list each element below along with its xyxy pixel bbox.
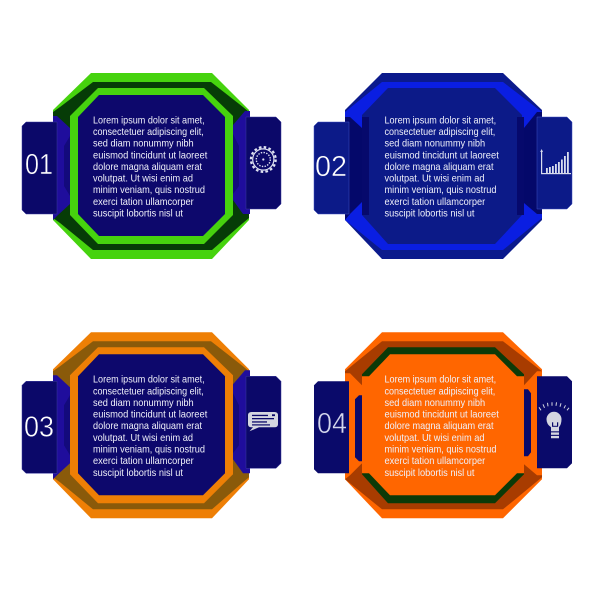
left number tab — [314, 122, 349, 214]
body text — [93, 115, 207, 220]
body text: sed diam nonummy nibh — [93, 139, 194, 150]
left connector — [53, 375, 70, 479]
left number tab — [314, 381, 349, 473]
body text: euismod tincidunt ut laoreet — [384, 410, 499, 421]
panel: step 04 bright orange — [314, 332, 572, 518]
right icon tab — [246, 117, 281, 209]
inner orange octagon — [70, 347, 233, 503]
left navy slot — [355, 395, 362, 461]
body text: volutpat. Ut wisi enim ad — [93, 174, 193, 185]
left number tab — [22, 381, 57, 473]
left connector shade — [64, 136, 70, 196]
body text: dolore magna aliquam erat — [93, 162, 202, 173]
right dark connector — [524, 112, 542, 214]
right orange connector — [524, 371, 542, 475]
body text: exerci tation ullamcorper — [384, 456, 486, 467]
left dark stripe — [362, 117, 369, 215]
right connector — [233, 370, 250, 473]
icon: speech bubble — [248, 412, 278, 431]
body text: consectetuer adipiscing elit, — [93, 127, 204, 138]
navy text panel — [78, 95, 225, 236]
body text: Lorem ipsum dolor sit amet, — [384, 375, 496, 386]
dark green ring — [53, 82, 249, 250]
body text: exerci tation ullamcorper — [384, 197, 486, 208]
outer dark blue octagon — [345, 73, 542, 259]
body text: minim veniam, quis nostrud — [93, 185, 205, 196]
body text: consectetuer adipiscing elit, — [93, 386, 204, 397]
outer green octagon — [53, 73, 249, 259]
brown ring — [53, 341, 249, 509]
body text: suscipit lobortis nisl ut — [93, 208, 183, 220]
body text: sed diam nonummy nibh — [93, 398, 194, 409]
left number tab — [22, 122, 57, 214]
body text: volutpat. Ut wisi enim ad — [384, 174, 484, 185]
body text: suscipit lobortis nisl ut — [384, 208, 475, 220]
body text: dolore magna aliquam erat — [384, 421, 494, 432]
left connector shade — [64, 395, 70, 455]
left orange connector — [345, 373, 362, 479]
panel: step 02 blue — [314, 73, 572, 259]
body text: consectetuer adipiscing elit, — [384, 386, 495, 397]
body text — [384, 115, 499, 220]
body text: exerci tation ullamcorper — [93, 197, 194, 208]
body text: suscipit lobortis nisl ut — [93, 468, 183, 479]
outer orange octagon — [53, 332, 249, 518]
right connector shade — [233, 134, 239, 194]
body text: Lorem ipsum dolor sit amet, — [93, 375, 205, 386]
body text: suscipit lobortis nisl ut — [384, 468, 475, 479]
body text: minim veniam, quis nostrud — [384, 444, 496, 455]
panel: step 03 orange — [22, 332, 281, 518]
number 02: 02 — [315, 151, 347, 183]
number 01: 01 — [25, 149, 53, 181]
body text: consectetuer adipiscing elit, — [384, 127, 495, 138]
body text: volutpat. Ut wisi enim ad — [93, 433, 193, 444]
left connector — [53, 116, 70, 220]
body text: exerci tation ullamcorper — [93, 456, 194, 467]
right connector shade — [233, 393, 239, 453]
body text: minim veniam, quis nostrud — [93, 444, 205, 455]
left dark connector — [345, 117, 362, 220]
body text: Lorem ipsum dolor sit amet, — [93, 115, 205, 126]
icon: gear — [251, 147, 276, 172]
icon: bar chart — [540, 149, 571, 174]
body text: volutpat. Ut wisi enim ad — [384, 433, 484, 444]
right navy slot — [524, 389, 531, 456]
bright blue ring — [345, 82, 542, 250]
right connector — [233, 111, 250, 214]
right icon tab — [537, 117, 572, 209]
orange text panel — [362, 354, 524, 495]
body text: euismod tincidunt ut laoreet — [384, 150, 499, 161]
body text: euismod tincidunt ut laoreet — [93, 150, 207, 161]
rust ring — [345, 341, 542, 509]
dark green ring — [362, 347, 524, 503]
body text — [93, 375, 207, 479]
inner green octagon — [70, 88, 233, 244]
body text: dolore magna aliquam erat — [93, 421, 202, 432]
outer orange octagon — [345, 332, 542, 518]
body text: dolore magna aliquam erat — [384, 162, 494, 173]
number 04: 04 — [317, 408, 347, 440]
icon: light bulb — [539, 402, 569, 438]
inner blue octagon — [362, 88, 522, 244]
right dark stripe — [517, 117, 524, 215]
navy text panel — [78, 354, 225, 495]
panel: step 01 green — [22, 73, 281, 259]
right icon tab — [246, 376, 281, 468]
body text: sed diam nonummy nibh — [384, 139, 485, 150]
body text: minim veniam, quis nostrud — [384, 185, 496, 196]
number 03: 03 — [24, 411, 54, 443]
body text — [384, 375, 499, 479]
right icon tab — [537, 376, 572, 468]
body text: Lorem ipsum dolor sit amet, — [384, 115, 496, 126]
body text: sed diam nonummy nibh — [384, 398, 485, 409]
body text: euismod tincidunt ut laoreet — [93, 410, 207, 421]
